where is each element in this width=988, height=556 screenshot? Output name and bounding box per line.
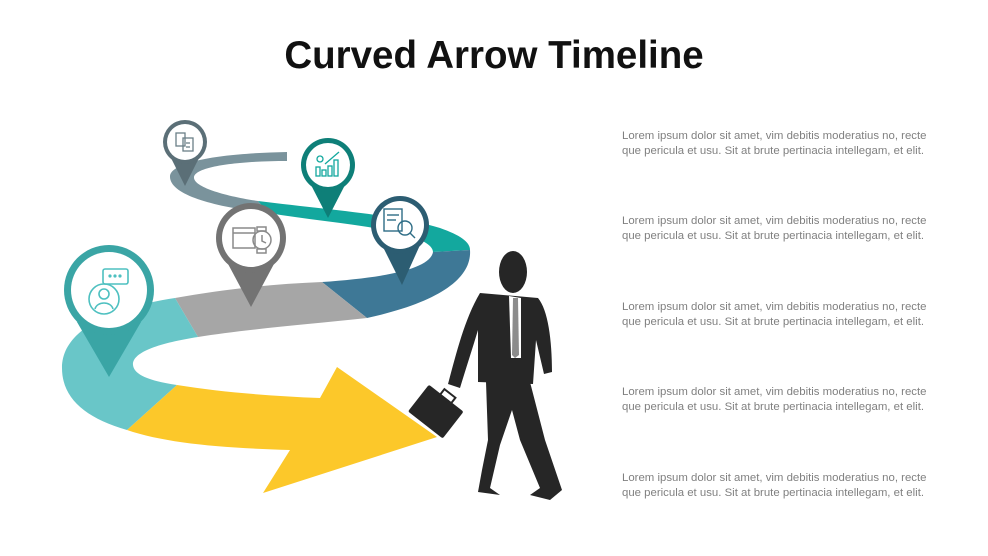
- text block 4: Lorem ipsum dolor sit amet, vim debitis moderatius no, recte: [622, 386, 927, 398]
- businessman silhouette: [408, 251, 562, 500]
- ribbon segment: blue: [322, 250, 470, 318]
- text block 3: Lorem ipsum dolor sit amet, vim debitis moderatius no, recte: [622, 301, 927, 313]
- text block 4: que pericula et usu. Sit at brute pertinacia intellegam, et elit.: [622, 401, 924, 413]
- text block 3: [622, 301, 927, 328]
- pin 5: user chat: [64, 245, 154, 377]
- pin 4: document analysis: [371, 196, 429, 285]
- text block 1: que pericula et usu. Sit at brute pertinacia intellegam, et elit.: [622, 145, 924, 157]
- ribbon segment: gray: [175, 282, 367, 337]
- pin 3: calendar and watch: [216, 203, 286, 307]
- text block 2: que pericula et usu. Sit at brute pertinacia intellegam, et elit.: [622, 230, 924, 242]
- text block 4: [622, 386, 927, 413]
- title: Curved Arrow Timeline: [284, 34, 704, 77]
- text block 5: que pericula et usu. Sit at brute pertinacia intellegam, et elit.: [622, 487, 924, 499]
- text block 1: Lorem ipsum dolor sit amet, vim debitis moderatius no, recte: [622, 130, 927, 142]
- ribbon segment: light teal: [62, 298, 198, 430]
- text block 1: [622, 130, 927, 157]
- text block 5: [622, 472, 927, 499]
- ribbon segment: teal: [258, 201, 470, 252]
- pin 1: documents: [163, 120, 207, 186]
- text block 2: [622, 215, 927, 242]
- ribbon segment: slate: [170, 152, 287, 213]
- pin 2: growth chart: [301, 138, 355, 218]
- arrow head: yellow: [127, 367, 437, 493]
- text block 5: Lorem ipsum dolor sit amet, vim debitis moderatius no, recte: [622, 472, 927, 484]
- text block 2: Lorem ipsum dolor sit amet, vim debitis moderatius no, recte: [622, 215, 927, 227]
- text block 3: que pericula et usu. Sit at brute pertinacia intellegam, et elit.: [622, 316, 924, 328]
